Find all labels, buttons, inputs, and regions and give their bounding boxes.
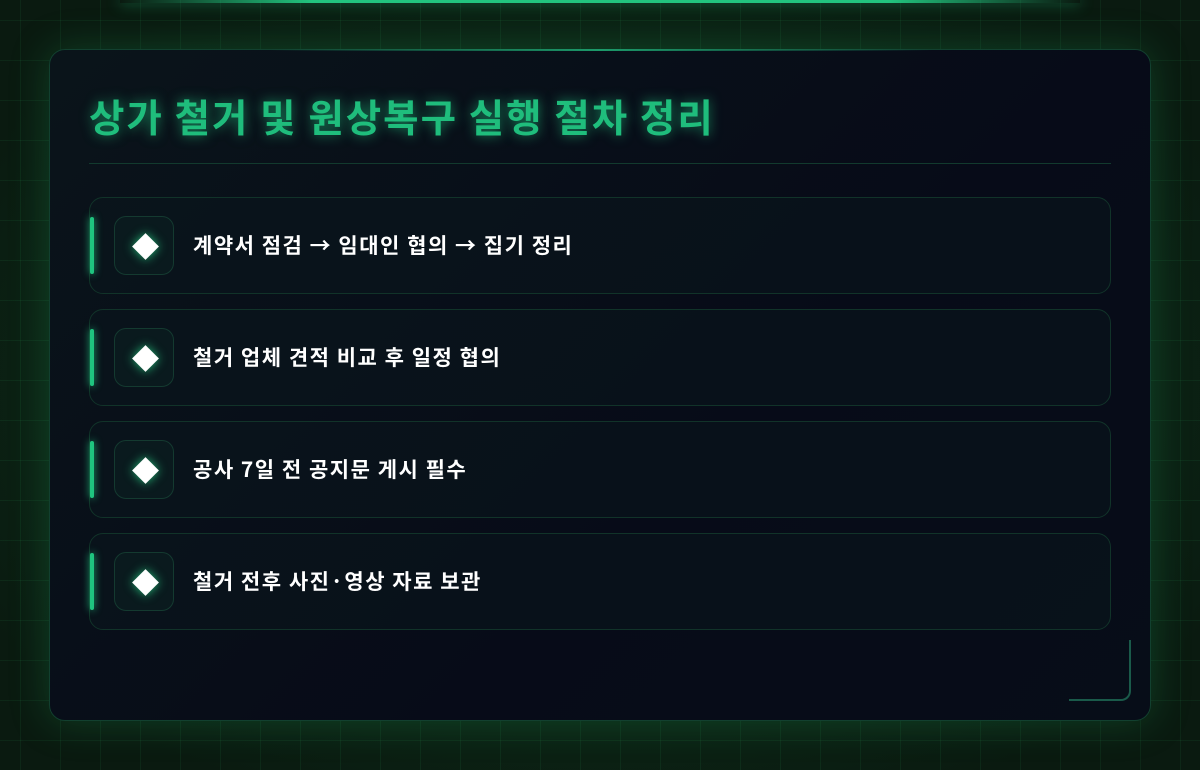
item 2 [89,309,1111,406]
text 4: 철거 전후 사진·영상 자료 보관 [193,566,482,596]
text 2: 철거 업체 견적 비교 후 일정 협의 [193,342,501,372]
icon: diamond [114,440,174,499]
icon: diamond [114,328,174,387]
title: 상가 철거 및 원상복구 실행 절차 정리 [89,88,715,144]
item 4 [89,533,1111,630]
item 1 [89,197,1111,294]
item 3 [89,421,1111,518]
text 3: 공사 7일 전 공지문 게시 필수 [193,454,467,484]
text 1: 계약서 점검 → 임대인 협의 → 집기 정리 [193,230,573,260]
icon: diamond [114,552,174,611]
icon: diamond [114,216,174,275]
